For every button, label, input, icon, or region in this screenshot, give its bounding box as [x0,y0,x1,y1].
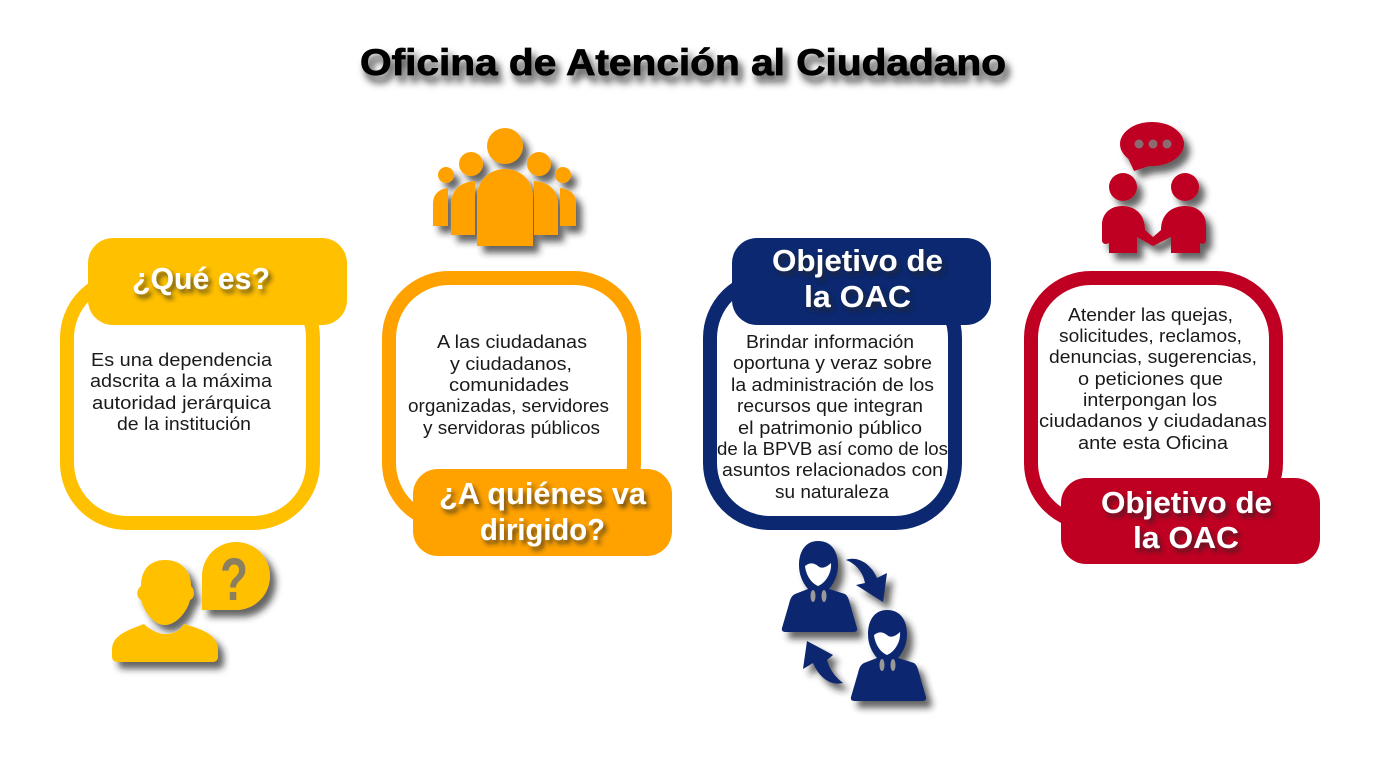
body text: Es una dependencia [91,350,273,370]
body text [90,350,273,434]
body text: de la BPVB así como de los [717,439,948,459]
body text: o peticiones que [1078,369,1223,389]
body text: el patrimonio público [738,418,922,438]
body text: Atender las quejas, [1068,305,1233,325]
heading [772,243,943,314]
heading [439,476,647,547]
heading: la OAC [804,279,911,314]
person two [851,610,926,701]
frame [389,278,634,523]
body text: de la institución [117,414,251,434]
body text: solicitudes, reclamos, [1059,326,1242,346]
heading: la OAC [1133,520,1239,555]
person one [782,541,857,632]
heading [1101,485,1272,555]
heading tab [88,238,347,325]
panel: objetivo navy [710,238,991,701]
body text: recursos que integran [737,396,923,416]
body text: A las ciudadanas [437,332,587,352]
frame [67,278,313,523]
icon: group of people [433,128,576,246]
panel: a quiénes va dirigido [389,128,672,556]
body text: interpongan los [1083,390,1217,410]
body text: su naturaleza [775,482,890,502]
body text: ante esta Oficina [1078,433,1229,453]
heading tab [732,238,991,325]
title: Oficina de Atención al Ciudadano [360,42,1006,83]
body text: y servidoras públicos [423,418,600,438]
body text: ciudadanos y ciudadanas [1039,411,1267,431]
icon: two people talking [1102,122,1206,253]
panel: objetivo red [1031,122,1320,564]
heading: ¿A quiénes va [439,476,647,511]
icon: person with question bubble [112,542,270,662]
arrow up [803,641,843,684]
body text: y ciudadanos, [450,354,572,374]
body text: adscrita a la máxima [90,371,273,391]
heading tab [1061,478,1320,564]
icon: person with question bubble: ? [220,546,248,613]
body text: denuncias, sugerencias, [1049,347,1257,367]
body text: autoridad jerárquica [92,393,272,413]
body text: la administración de los [731,375,934,395]
frame [1031,278,1276,523]
body text [1039,305,1267,453]
body text: comunidades [449,375,569,395]
body text [717,332,948,502]
arrow down [846,559,887,602]
heading: dirigido? [480,512,605,547]
body text: asuntos relacionados con [722,460,943,480]
heading: Objetivo de [772,243,943,278]
heading: Objetivo de [1101,485,1272,520]
icon: two people exchanging [782,541,926,701]
panel: qué es [67,238,347,662]
body text: Brindar información [746,332,914,352]
heading tab [413,469,672,556]
body text [408,332,609,438]
heading: ¿Qué es? [132,261,270,296]
body text: oportuna y veraz sobre [733,353,932,373]
body text: organizadas, servidores [408,396,609,416]
frame [710,278,955,523]
